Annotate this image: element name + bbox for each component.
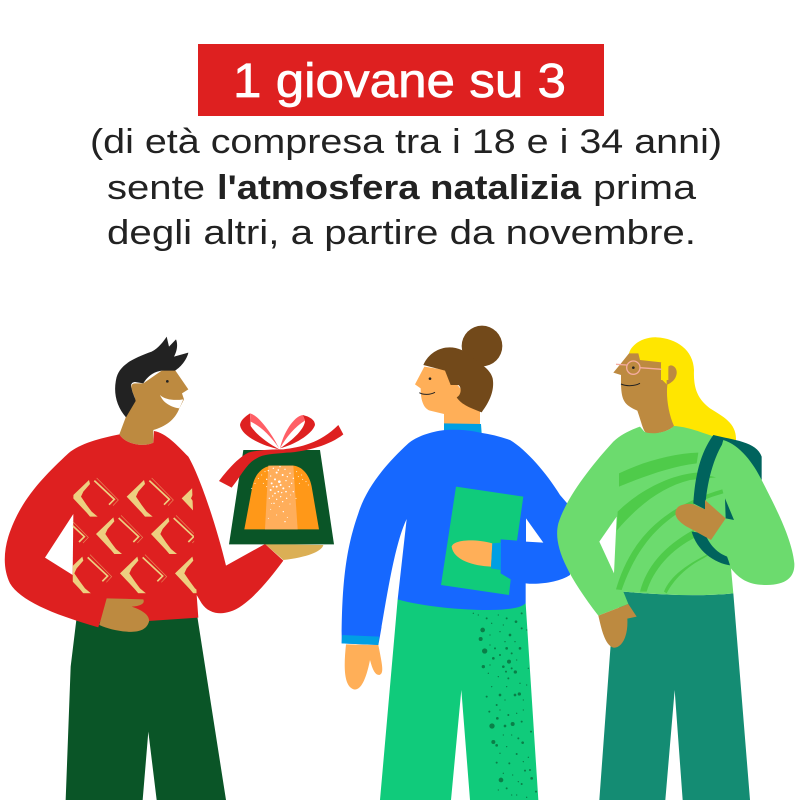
raised arm	[712, 440, 794, 585]
subtitle text block: prima	[593, 169, 696, 207]
man red sweater	[5, 431, 283, 627]
hair lock	[661, 362, 668, 380]
eye and mouth	[621, 366, 640, 386]
man smile	[160, 395, 183, 408]
woman hair	[423, 347, 493, 412]
woman hand on folder	[452, 540, 492, 567]
man palm under gift	[265, 544, 323, 560]
gift: panettone	[244, 466, 319, 529]
title banner: 1 giovane su 3	[233, 55, 566, 108]
man hand on hip	[99, 598, 149, 632]
gap between arm and body	[599, 517, 617, 573]
woman mouth and eye	[419, 377, 435, 394]
ear	[667, 365, 677, 385]
woman left cuff	[342, 635, 379, 645]
gift: green box	[229, 450, 334, 544]
glasses	[616, 361, 662, 374]
woman blue sweater	[342, 430, 570, 645]
subtitle text block: sente	[107, 169, 205, 207]
sweater chevron pattern	[72, 478, 197, 594]
gap between arm and body	[526, 518, 543, 543]
woman green folder	[441, 487, 523, 595]
hand on hip	[598, 604, 637, 648]
woman collar	[444, 423, 482, 433]
subtitle text block: degli altri, a partire da novembre.	[107, 214, 696, 252]
blonde hair	[629, 337, 736, 440]
subtitle text block	[90, 123, 722, 252]
woman right cuff	[491, 543, 501, 570]
woman neck and face	[415, 367, 480, 424]
green sweater	[557, 426, 733, 616]
woman left hand	[345, 644, 382, 689]
gift: ribbon bow	[219, 413, 343, 488]
subtitle text block: (di età compresa tra i 18 e i 34 anni)	[90, 123, 722, 161]
face and neck	[613, 353, 674, 434]
backpack strap	[692, 435, 732, 566]
sweater stripes	[616, 453, 723, 593]
backpack body	[713, 435, 762, 480]
strap gap detail	[725, 498, 734, 520]
subtitle text block: l'atmosfera natalizia	[217, 169, 582, 207]
trousers speckle texture	[473, 612, 537, 798]
title banner	[198, 44, 604, 116]
man trousers	[66, 617, 226, 800]
trousers	[599, 592, 750, 800]
woman hair bun	[462, 326, 502, 366]
man eye	[166, 380, 169, 383]
woman trousers	[380, 599, 538, 800]
character: woman in green sweater with backpack	[557, 337, 794, 800]
character: man in red sweater with gift	[5, 337, 343, 800]
hand on strap	[675, 500, 726, 540]
character: woman in blue sweater with folder	[342, 326, 570, 800]
man neck and face	[119, 370, 188, 445]
gap between arm and body	[45, 514, 73, 575]
man hair	[115, 337, 188, 417]
